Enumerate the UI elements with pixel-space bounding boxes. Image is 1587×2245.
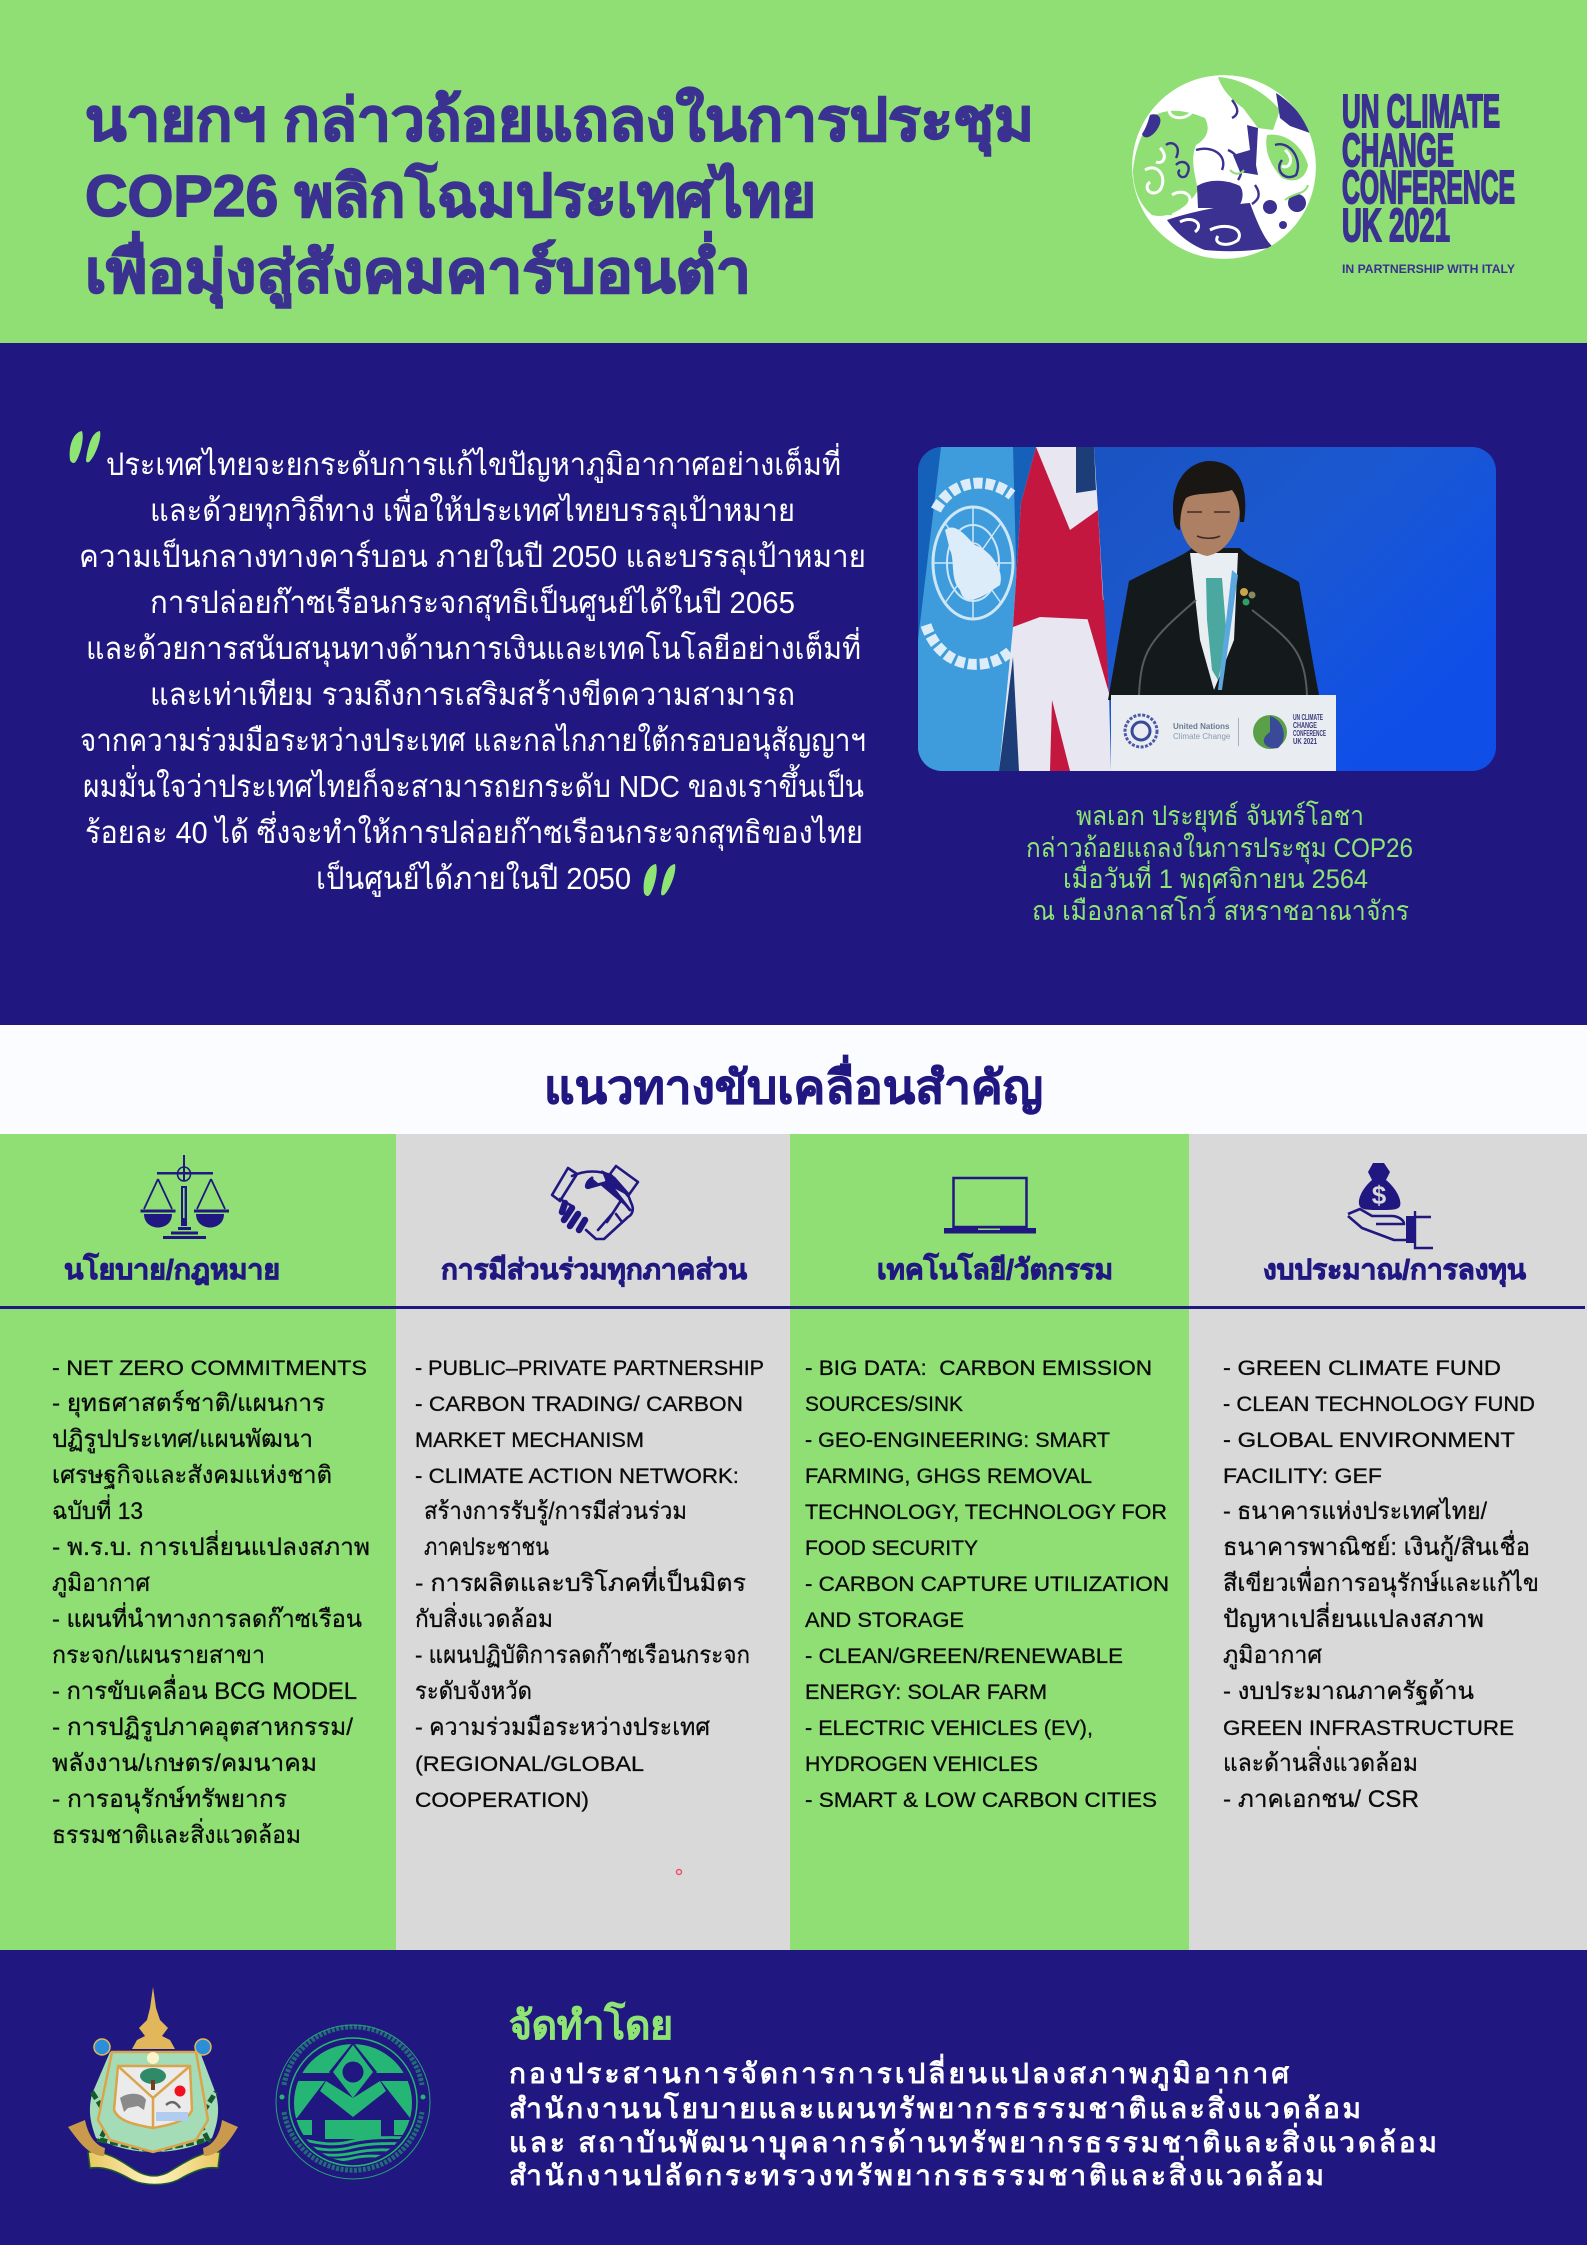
photo caption (1026, 800, 1413, 926)
technology list: AND STORAGE (805, 1608, 964, 1632)
participation list: MARKET MECHANISM (415, 1428, 644, 1452)
participation list: (REGIONAL/GLOBAL (415, 1752, 644, 1776)
icon: scales of justice (140, 1155, 229, 1239)
participation list: - PUBLIC–PRIVATE PARTNERSHIP (415, 1356, 764, 1380)
podium: United Nations (1173, 722, 1230, 731)
participation list: - CARBON TRADING/ CARBON (415, 1392, 743, 1416)
policy list: ฉบับที่ 13 (52, 1494, 143, 1525)
logo: ONEP circle (276, 2025, 430, 2179)
policy list: พลังงาน/เกษตร/คมนาคม (52, 1750, 317, 1777)
title: COP26 พลิกโฉมประเทศไทย (85, 161, 816, 229)
quote text: จากความร่วมมือระหว่างประเทศ และกลไกภายใต้กรอบอนุสัญญาฯ (80, 723, 866, 760)
credit lines (509, 2053, 1437, 2191)
policy list: กระจก/แผนรายสาขา (52, 1642, 265, 1669)
budget list: - GLOBAL ENVIRONMENT (1223, 1428, 1515, 1452)
budget list (1223, 1356, 1539, 1813)
title (85, 86, 1034, 309)
icon: closing quote mark (644, 864, 675, 896)
technology list: - ELECTRIC VEHICLES (EV), (805, 1716, 1093, 1740)
participation list: COOPERATION) (415, 1788, 589, 1812)
panel: participation column (396, 1134, 790, 1950)
policy list: ภูมิอากาศ (52, 1570, 150, 1598)
policy list (52, 1356, 370, 1849)
participation list (415, 1356, 764, 1812)
photo caption: เมื่อวันที่ 1 พฤศจิกายน 2564 (1063, 860, 1368, 894)
panel: header (0, 0, 1587, 343)
UK flag (999, 447, 1111, 771)
technology list: - BIG DATA: CARBON EMISSION (805, 1356, 1152, 1380)
panel: policy and law column (0, 1134, 396, 1950)
podium: UN CLIMATE (1293, 713, 1323, 722)
podium: CONFERENCE (1293, 729, 1326, 738)
policy list: - NET ZERO COMMITMENTS (52, 1356, 367, 1380)
budget list: สีเขียวเพื่อการอนุรักษ์และแก้ไข (1223, 1566, 1539, 1598)
policy list: ธรรมชาติและสิ่งแวดล้อม (52, 1818, 301, 1849)
technology list: - SMART & LOW CARBON CITIES (805, 1788, 1157, 1812)
icon: COP26 globe (1132, 75, 1316, 259)
budget list: GREEN INFRASTRUCTURE (1223, 1716, 1514, 1740)
podium (1111, 695, 1336, 771)
budget list: ธนาคารพาณิชย์: เงินกู้/สินเชื่อ (1223, 1530, 1530, 1562)
budget list: - ภาคเอกชน/ CSR (1223, 1786, 1419, 1813)
technology list: - CARBON CAPTURE UTILIZATION (805, 1572, 1169, 1596)
budget list: ปัญหาเปลี่ยนแปลงสภาพ (1223, 1602, 1484, 1633)
quote text (79, 443, 866, 897)
quote text: และด้วยทุกวิถีทาง เพื่อให้ประเทศไทยบรรลุเป้าหมาย (150, 489, 795, 530)
title: นายกฯ กล่าวถ้อยแถลงในการประชุม (85, 86, 1034, 157)
column title: นโยบาย/กฎหมาย (64, 1252, 280, 1286)
policy list: - การขับเคลื่อน BCG MODEL (52, 1674, 357, 1705)
column title: การมีส่วนร่วมทุกภาคส่วน (441, 1254, 747, 1287)
budget list: FACILITY: GEF (1223, 1464, 1382, 1488)
quote text: ประเทศไทยจะยกระดับการแก้ไขปัญหาภูมิอากาศอย่างเต็มที่ (106, 443, 841, 483)
technology list: - GEO-ENGINEERING: SMART (805, 1428, 1110, 1452)
technology list: TECHNOLOGY, TECHNOLOGY FOR (805, 1500, 1167, 1524)
technology list: - CLEAN/GREEN/RENEWABLE (805, 1644, 1123, 1668)
logo text: CHANGE (1342, 124, 1454, 176)
icon: handshake (552, 1166, 638, 1239)
photo caption: พลเอก ประยุทธ์ จันทร์โอชา (1076, 800, 1364, 833)
quote text: การปล่อยก๊าซเรือนกระจกสุทธิเป็นศูนย์ได้ในปี 2065 (150, 584, 795, 622)
policy list: เศรษฐกิจและสังคมแห่งชาติ (52, 1462, 332, 1489)
photo caption: ณ เมืองกลาสโกว์ สหราชอาณาจักร (1032, 895, 1409, 926)
credit heading: จัดทำโดย (509, 2002, 673, 2048)
technology list: SOURCES/SINK (805, 1392, 964, 1416)
small red ring mark (676, 1870, 682, 1874)
icon: laptop (944, 1178, 1036, 1234)
technology list: HYDROGEN VEHICLES (805, 1752, 1038, 1776)
logo: ministry crest (68, 1987, 238, 2184)
panel: footer (68, 1987, 1435, 2186)
speaker (1108, 461, 1320, 700)
quote text: ร้อยละ 40 ได้ ซึ่งจะทำให้การปล่อยก๊าซเรือนกระจกสุทธิของไทย (85, 811, 863, 852)
policy list: - การปฏิรูปภาคอุตสาหกรรม/ (52, 1714, 353, 1742)
budget list: และด้านสิ่งแวดล้อม (1223, 1746, 1418, 1777)
participation list: - CLIMATE ACTION NETWORK: (415, 1464, 739, 1488)
quote text: และเท่าเทียม รวมถึงการเสริมสร้างขีดความสามารถ (150, 677, 795, 712)
policy list: - การอนุรักษ์ทรัพยากร (52, 1785, 287, 1814)
budget list: - GREEN CLIMATE FUND (1223, 1356, 1501, 1380)
logo text: IN PARTNERSHIP WITH ITALY (1342, 262, 1515, 276)
quote text: และด้วยการสนับสนุนทางด้านการเงินและเทคโนโลยีอย่างเต็มที่ (86, 627, 861, 668)
participation list: - การผลิตและบริโภคที่เป็นมิตร (415, 1566, 746, 1597)
podium: UK 2021 (1293, 737, 1317, 746)
participation list: ภาคประชาชน (424, 1534, 549, 1561)
policy list: - แผนที่นำทางการลดก๊าซเรือน (52, 1602, 362, 1633)
photo: speaker at COP26 podium (918, 447, 1496, 771)
quote text: ผมมั่นใจว่าประเทศไทยก็จะสามารถยกระดับ NDC ของเราขึ้นเป็น (83, 764, 864, 804)
credit lines: สำนักงานนโยบายและแผนทรัพยากรธรรมชาติและสิ่งแวดล้อม (509, 2088, 1361, 2124)
technology list: ENERGY: SOLAR FARM (805, 1680, 1047, 1704)
panel: section heading band (0, 1025, 1587, 1134)
podium: CHANGE (1293, 721, 1317, 730)
credit lines: และ สถาบันพัฒนาบุคลากรด้านทรัพยากรธรรมชาติและสิ่งแวดล้อม (509, 2122, 1437, 2160)
panel: budget column (1189, 1134, 1587, 1950)
policy list: - ยุทธศาสตร์ชาติ/แผนการ (52, 1389, 325, 1418)
budget list: - ธนาคารแห่งประเทศไทย/ (1223, 1497, 1487, 1525)
credit lines: กองประสานการจัดการการเปลี่ยนแปลงสภาพภูมิอากาศ (509, 2053, 1290, 2091)
participation list: สร้างการรับรู้/การมีส่วนร่วม (424, 1498, 687, 1526)
podium: Climate Change (1173, 732, 1231, 741)
icon: money bag in hand (1348, 1163, 1433, 1248)
technology list: FARMING, GHGS REMOVAL (805, 1464, 1092, 1488)
quote text: เป็นศูนย์ได้ภายในปี 2050 (316, 860, 631, 897)
logo text (1342, 85, 1515, 276)
photo caption: กล่าวถ้อยแถลงในการประชุม COP26 (1026, 832, 1413, 865)
policy list: ปฏิรูปประเทศ/แผนพัฒนา (52, 1426, 313, 1454)
quote text: ความเป็นกลางทางคาร์บอน ภายในปี 2050 และบรรลุเป้าหมาย (79, 538, 866, 576)
UN flag (918, 447, 1017, 771)
heading: แนวทางขับเคลื่อนสำคัญ (544, 1055, 1043, 1114)
participation list: ระดับจังหวัด (415, 1678, 532, 1705)
participation list: - ความร่วมมือระหว่างประเทศ (415, 1714, 710, 1741)
icon: money bag in hand: $ (1372, 1180, 1387, 1210)
credit lines: สำนักงานปลัดกระทรวงทรัพยากรธรรมชาติและสิ่งแวดล้อม (509, 2155, 1324, 2191)
technology list (805, 1356, 1169, 1812)
logo text: UK 2021 (1342, 199, 1450, 251)
title: เพื่อมุ่งสู่สังคมคาร์บอนต่ำ (85, 231, 751, 309)
budget list: - งบประมาณภาครัฐด้าน (1223, 1678, 1474, 1705)
policy list: - พ.ร.บ. การเปลี่ยนแปลงสภาพ (52, 1530, 370, 1561)
panel: quote section (70, 431, 1496, 920)
column title: เทคโนโลยี/วัตกรรม (877, 1252, 1113, 1285)
icon: opening quote mark (70, 431, 100, 463)
technology list: FOOD SECURITY (805, 1536, 978, 1560)
column title: งบประมาณ/การลงทุน (1263, 1254, 1526, 1287)
participation list: - แผนปฏิบัติการลดก๊าซเรือนกระจก (415, 1642, 750, 1669)
panel: technology column (790, 1134, 1189, 1950)
budget list: - CLEAN TECHNOLOGY FUND (1223, 1392, 1535, 1416)
budget list: ภูมิอากาศ (1223, 1642, 1322, 1670)
participation list: กับสิ่งแวดล้อม (415, 1602, 553, 1633)
